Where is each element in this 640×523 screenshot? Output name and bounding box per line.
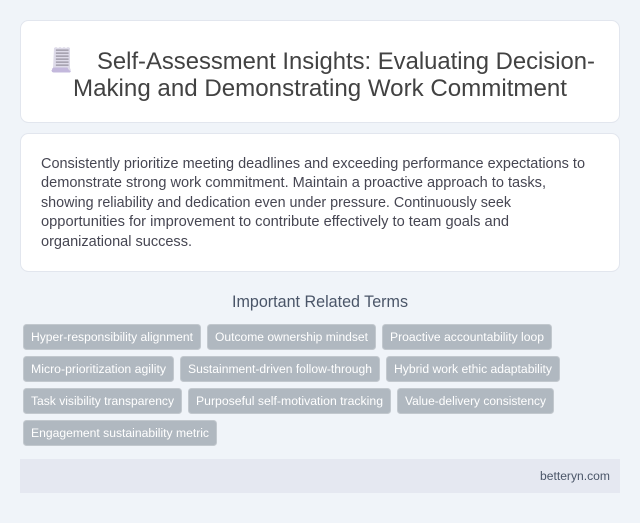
tag: Task visibility transparency [31,394,175,408]
tag: Hybrid work ethic adaptability [394,362,553,376]
title: Making and Demonstrating Work Commitment [73,75,567,102]
tag: Sustainment-driven follow-through [188,362,372,376]
panel: summary text: Consistently prioritize meeting deadlines and exceeding performance expectations to [41,156,585,172]
tag [180,356,380,382]
tag [188,388,390,414]
tag [24,388,182,414]
tag: Proactive accountability loop [390,330,544,344]
tag: Outcome ownership mindset [215,330,369,344]
tag [382,324,552,350]
footer: betteryn.com [540,469,610,483]
title [73,48,595,102]
panel: title card [20,20,620,122]
tag [208,324,376,350]
tag [24,356,174,382]
tag: Value-delivery consistency [405,394,547,408]
tag [386,356,560,382]
panel: summary text: opportunities for improvement to contribute effectively to team goals and [41,214,509,230]
tag [398,388,554,414]
panel: summary text: showing reliability and dedication even under pressure. Continuously seek [41,195,512,211]
heading: related terms: Important Related Terms [232,293,408,311]
tag [24,420,216,446]
tag [24,324,200,350]
tag: Hyper-responsibility alignment [31,330,194,344]
panel: summary text: organizational success. [41,234,192,250]
panel: summary text [20,134,620,272]
title: Self-Assessment Insights: Evaluating Decision- [97,48,595,75]
tag: Purposeful self-motivation tracking [196,394,383,408]
footer [20,459,620,493]
icon: document scroll [52,47,71,72]
tag list [24,324,560,446]
panel: summary text: demonstrate strong work commitment. Maintain a proactive approach to tasks, [41,175,546,191]
tag: Micro-prioritization agility [31,362,167,376]
tag: Engagement sustainability metric [31,426,209,440]
